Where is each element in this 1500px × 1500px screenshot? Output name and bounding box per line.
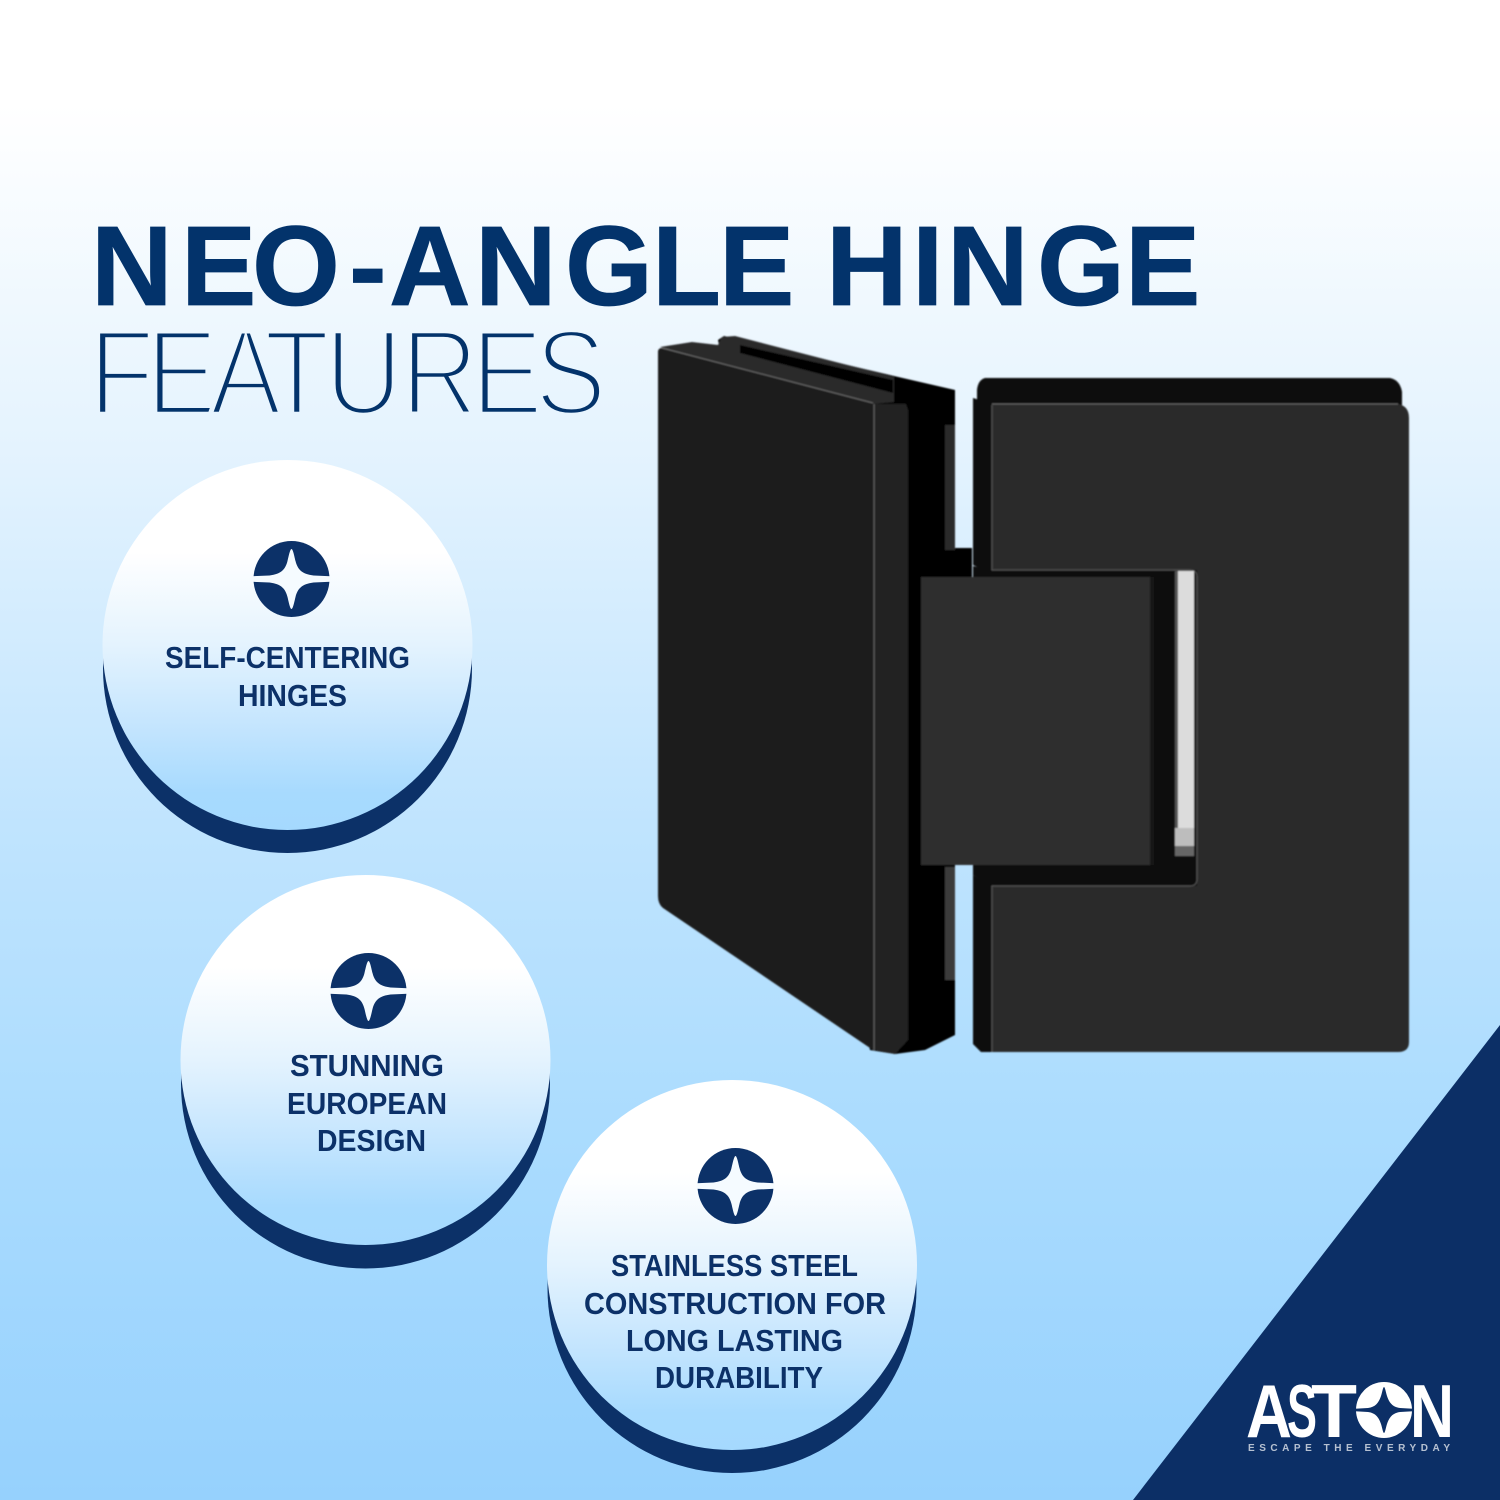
feature label: EUROPEAN	[287, 1086, 447, 1121]
corner triangle	[1133, 1025, 1500, 1500]
icon: star badge	[696, 1148, 774, 1224]
hinge center block	[921, 577, 1150, 865]
glass slot highlight	[1175, 571, 1194, 856]
logo wordmark: A	[1246, 1369, 1292, 1453]
feature 3	[547, 1080, 917, 1473]
icon: star badge	[330, 953, 408, 1029]
icon: star badge	[252, 541, 330, 617]
feature label: LONG LASTING	[626, 1323, 843, 1358]
feature label	[584, 1248, 886, 1395]
logo star emblem	[1355, 1382, 1413, 1438]
hinge center strip	[1150, 577, 1154, 865]
feature label: STUNNING	[290, 1048, 444, 1083]
feature 2	[180, 875, 550, 1268]
disc shadow	[548, 1104, 916, 1473]
product photo: black hinge	[658, 336, 1409, 1054]
disc	[102, 460, 472, 830]
feature label: SELF-CENTERING	[165, 640, 410, 675]
disc	[547, 1080, 917, 1450]
hinge right plate	[973, 378, 1409, 1052]
logo: aston	[1246, 1369, 1454, 1454]
feature 1	[102, 460, 472, 853]
heading: neo-angle hinge: NEO-ANGLE HINGE	[91, 203, 1200, 329]
logo wordmark: O	[1356, 1369, 1412, 1453]
feature label: HINGES	[238, 678, 347, 713]
logo wordmark: T	[1311, 1369, 1357, 1453]
logo wordmark	[1246, 1369, 1454, 1453]
feature label: STAINLESS STEEL	[611, 1248, 858, 1283]
disc	[180, 875, 550, 1245]
disc shadow	[103, 484, 472, 853]
heading: features: FEATURES	[89, 305, 606, 441]
feature label: CONSTRUCTION FOR	[584, 1286, 886, 1321]
hinge left plate	[658, 336, 972, 1054]
logo wordmark: S	[1287, 1369, 1317, 1453]
feature label: DESIGN	[317, 1123, 426, 1158]
title	[89, 203, 1200, 441]
disc shadow	[181, 900, 550, 1268]
logo tagline: ESCAPE THE EVERYDAY	[1248, 1443, 1450, 1454]
feature label	[165, 640, 410, 713]
feature label: DURABILITY	[655, 1360, 823, 1395]
feature label	[287, 1048, 447, 1158]
logo wordmark: N	[1410, 1369, 1454, 1453]
